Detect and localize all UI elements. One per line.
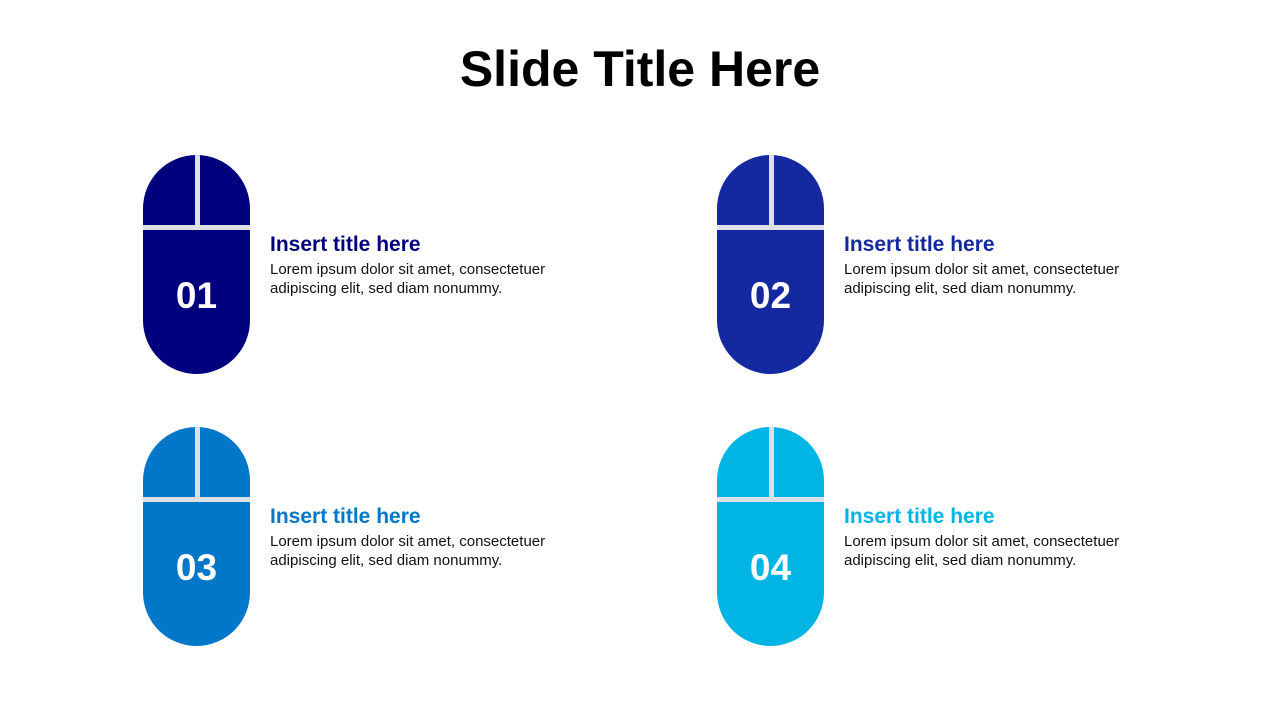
text 01: Lorem ipsum dolor sit amet, consectetuer adipiscing elit, sed diam nonummy. (270, 261, 545, 297)
text 01 (270, 233, 545, 297)
mouse 01: 01 (176, 275, 217, 316)
text 02: Insert title here (844, 233, 995, 256)
text 01: Insert title here (270, 233, 421, 256)
mouse 02: 02 (750, 275, 791, 316)
title: Slide Title Here (460, 41, 820, 97)
text 02 (844, 233, 1119, 297)
mouse 03: 03 (176, 547, 217, 588)
text 04 (844, 505, 1119, 569)
text 03 (270, 505, 545, 569)
text 03: Lorem ipsum dolor sit amet, consectetuer adipiscing elit, sed diam nonummy. (270, 533, 545, 569)
mouse 01 (143, 155, 250, 374)
mouse 04: 04 (750, 547, 791, 588)
text 04: Lorem ipsum dolor sit amet, consectetuer adipiscing elit, sed diam nonummy. (844, 533, 1119, 569)
text 03: Insert title here (270, 505, 421, 528)
text 02: Lorem ipsum dolor sit amet, consectetuer adipiscing elit, sed diam nonummy. (844, 261, 1119, 297)
text 04: Insert title here (844, 505, 995, 528)
mouse 02 (717, 155, 824, 374)
mouse 04 (717, 427, 824, 646)
mouse 03 (143, 427, 250, 646)
